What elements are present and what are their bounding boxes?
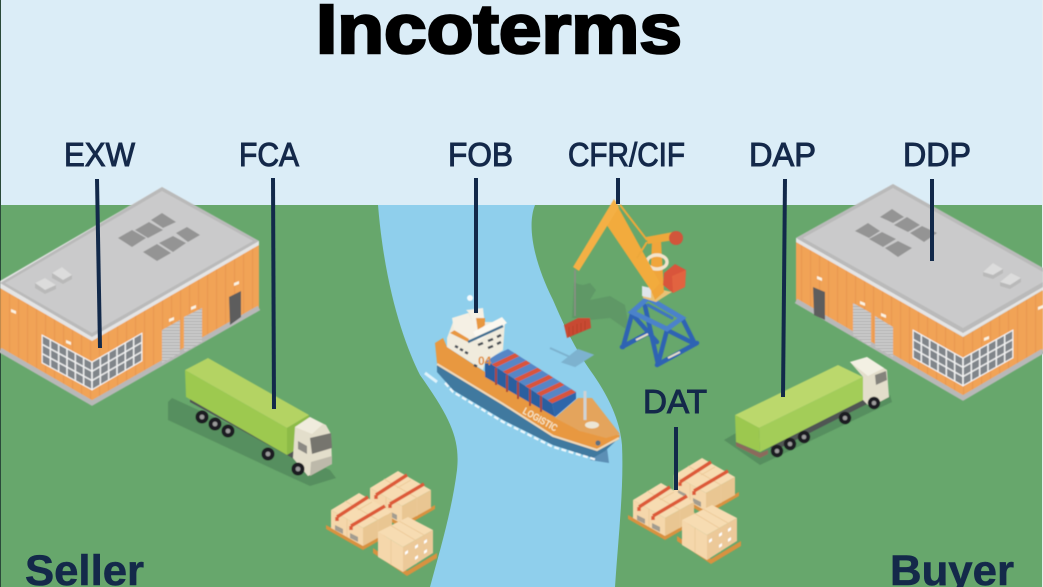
funnel <box>466 308 485 332</box>
wake <box>425 373 437 382</box>
hoist cable <box>574 270 576 316</box>
label: FCA: FCA <box>239 136 299 173</box>
front stack <box>326 493 396 550</box>
bridge windows strip <box>468 326 503 342</box>
cab <box>850 357 889 407</box>
roller door two <box>875 316 893 357</box>
red counterweight <box>663 264 686 293</box>
container tops <box>485 349 576 403</box>
roof <box>0 187 259 341</box>
river <box>378 205 622 587</box>
warehouse: seller <box>0 187 259 405</box>
left wall <box>796 240 963 400</box>
windows <box>455 335 501 366</box>
side door <box>229 291 241 325</box>
back stack <box>365 471 435 528</box>
window left <box>42 335 92 390</box>
hull name: LOGISTIC <box>521 406 559 434</box>
side door <box>813 287 825 320</box>
warehouse: buyer <box>796 184 1043 400</box>
wheels <box>771 397 880 457</box>
truck: seller side <box>168 358 336 486</box>
lower hull <box>437 363 620 458</box>
bow shadow <box>590 448 609 463</box>
cab box <box>642 286 651 298</box>
ground <box>0 205 1043 587</box>
container red bands <box>492 353 576 403</box>
plain stack <box>677 505 741 564</box>
truck shadow <box>168 398 336 486</box>
hanging container <box>564 318 591 338</box>
trailer side <box>759 377 863 452</box>
crane shadow on water <box>550 348 592 366</box>
wall lights <box>817 276 1043 341</box>
bow mast <box>584 391 586 420</box>
wall base <box>0 308 259 403</box>
blue gantry base <box>622 298 697 365</box>
wall lights <box>11 281 239 345</box>
wall base <box>796 301 1043 398</box>
roof skylights <box>118 213 200 261</box>
boom rear <box>606 205 660 292</box>
container ship <box>425 295 620 463</box>
pointer lines <box>97 178 932 490</box>
chassis <box>190 395 296 460</box>
bridge base <box>447 312 505 370</box>
container side markings <box>496 368 541 412</box>
ship number: 04 <box>478 354 492 368</box>
upper hull <box>435 338 620 449</box>
trailer top <box>735 365 863 428</box>
container side <box>485 360 555 417</box>
roof <box>796 184 1043 337</box>
bow deck <box>555 398 620 438</box>
orange bridge stripe <box>450 328 470 342</box>
front stack <box>628 483 698 540</box>
foam <box>445 383 597 460</box>
bridge wing <box>473 317 507 341</box>
label: EXW: EXW <box>64 136 136 173</box>
right wall <box>92 243 259 405</box>
hubs <box>200 415 300 471</box>
trailer rear <box>735 415 760 452</box>
label: DAT: DAT <box>643 383 707 420</box>
trailer top <box>185 358 309 428</box>
back stack <box>669 458 739 515</box>
right wall <box>963 290 1043 400</box>
crane shadow on land <box>572 282 630 332</box>
foot pads <box>636 334 680 358</box>
trailer side <box>185 370 287 455</box>
window right <box>963 330 1013 386</box>
slewing ring <box>647 255 667 269</box>
platform <box>642 287 672 302</box>
upper deck <box>452 313 478 342</box>
container end <box>552 392 576 417</box>
label: DDP: DDP <box>903 136 971 173</box>
truck: buyer side <box>724 357 892 465</box>
window right <box>92 333 142 390</box>
chassis <box>770 395 875 452</box>
label: DAP: DAP <box>749 136 816 173</box>
right edge strip <box>1042 0 1043 587</box>
boom front <box>573 199 619 271</box>
label: CFR/CIF: CFR/CIF <box>568 136 685 173</box>
hull stripe <box>437 364 619 450</box>
left wall <box>0 288 92 405</box>
mast ball <box>467 295 473 301</box>
left edge strip <box>0 0 1 587</box>
roller door one <box>853 303 871 347</box>
window left <box>913 330 963 386</box>
roof skylights <box>855 209 937 257</box>
anchor <box>595 440 601 446</box>
front wheel <box>292 462 304 476</box>
tie rods <box>620 205 647 258</box>
bow hatch <box>585 422 599 428</box>
plain stack <box>373 517 437 576</box>
label: FOB: FOB <box>448 136 513 173</box>
cargo pallets: seller <box>326 471 437 576</box>
crane <box>550 199 697 366</box>
cab <box>293 417 332 476</box>
roller door one <box>162 320 180 363</box>
trailer end <box>287 415 309 455</box>
rear bumper <box>736 442 768 458</box>
wheels <box>196 410 274 460</box>
hubs <box>775 401 876 453</box>
cargo pallets: buyer <box>628 458 741 564</box>
counter arm <box>646 232 675 244</box>
sky background <box>0 0 1043 206</box>
truck shadow <box>724 395 892 465</box>
column <box>650 240 664 300</box>
roof vents <box>35 267 72 294</box>
red pulley <box>669 231 683 245</box>
roof vents <box>983 263 1021 289</box>
roller door two <box>184 308 202 352</box>
